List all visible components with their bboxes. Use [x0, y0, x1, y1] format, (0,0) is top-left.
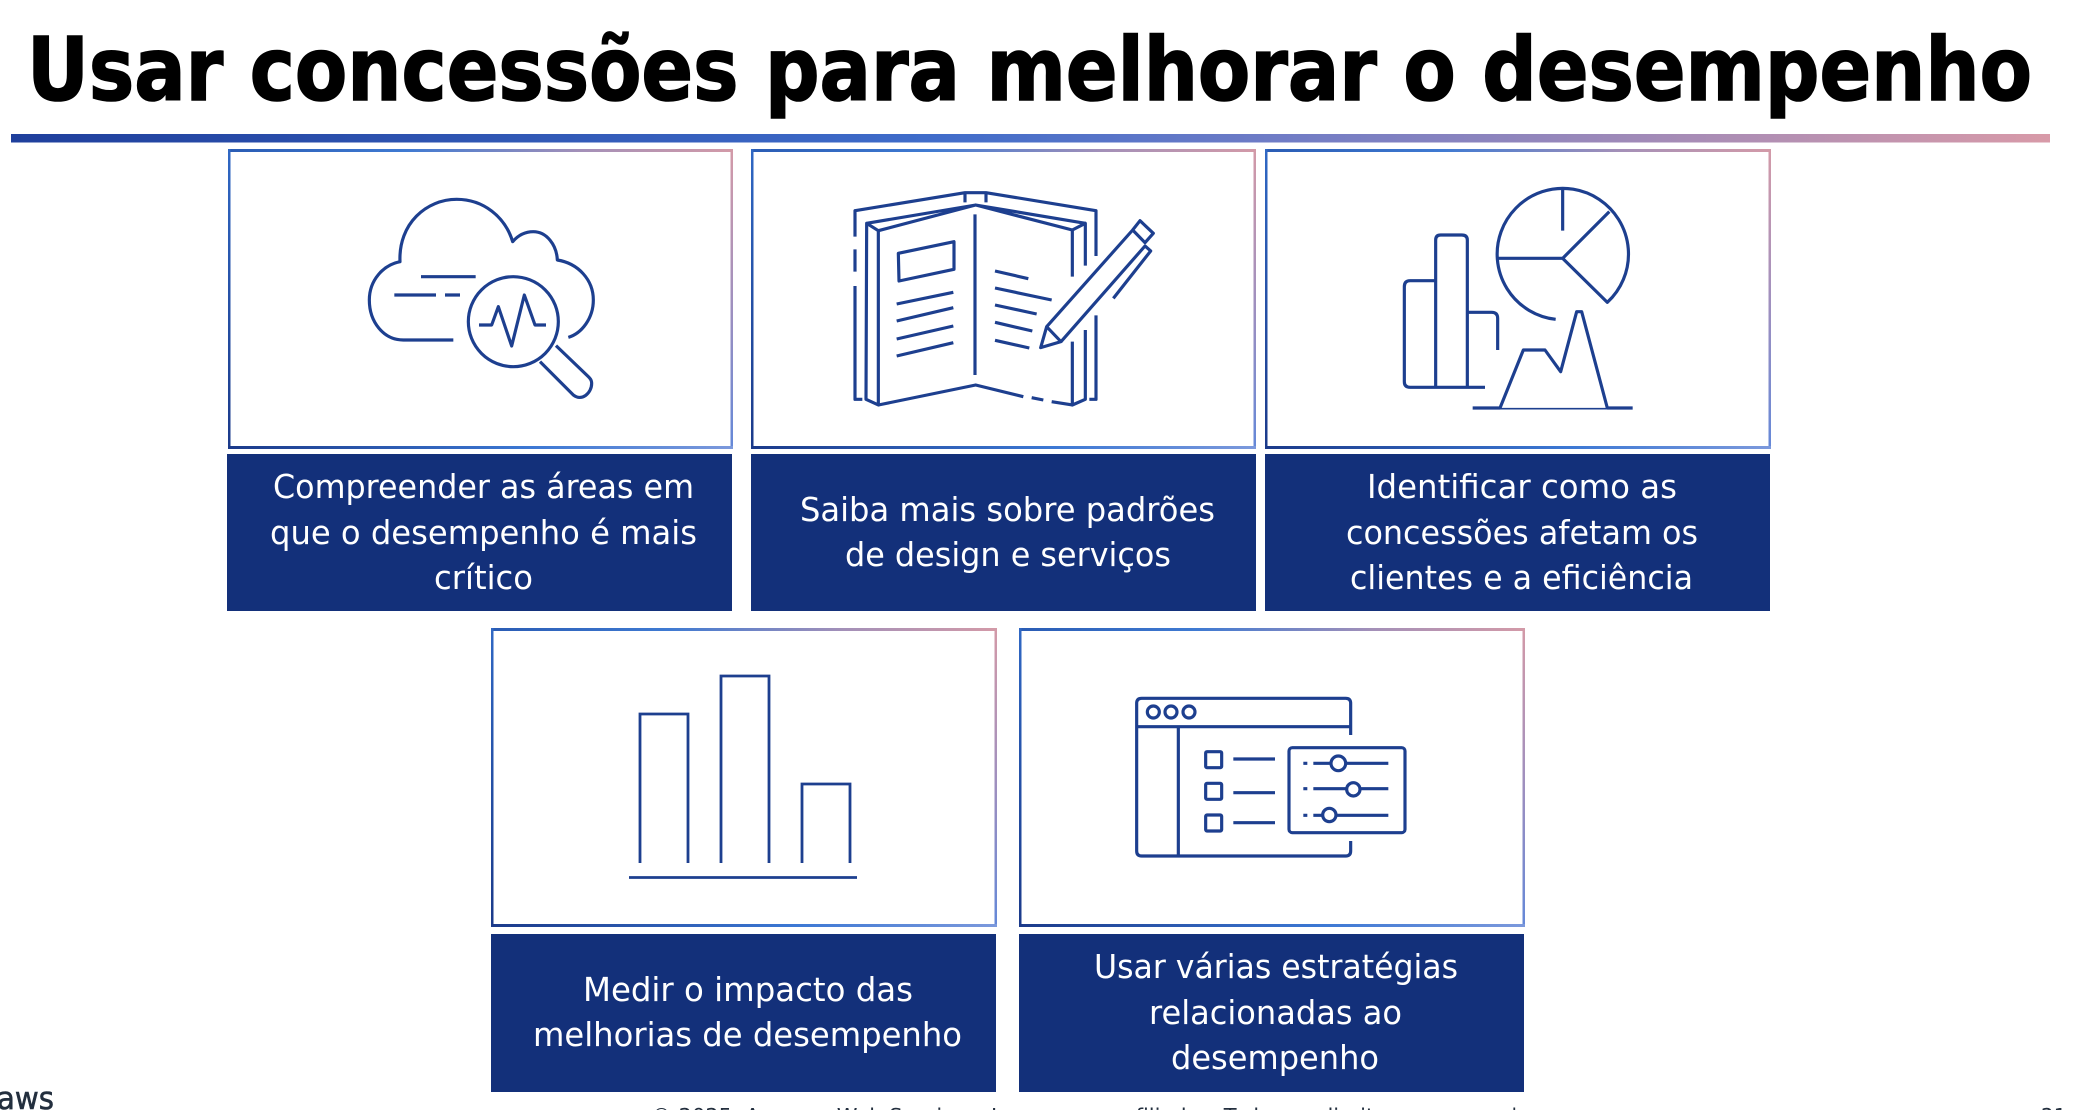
card frame 1	[228, 149, 733, 449]
label box 2: Saiba mais sobre padrões	[800, 490, 1215, 529]
label box 3: concessões afetam os	[1346, 513, 1698, 552]
icon: open book and pen	[855, 193, 1153, 405]
label box 5: desempenho	[1171, 1038, 1379, 1077]
icon: window with sliders	[1137, 698, 1405, 856]
panel: saiba mais	[751, 149, 1256, 611]
card frame 3	[1265, 149, 1771, 449]
label box 3: Identificar como as	[1367, 467, 1677, 506]
title underline gradient bar	[11, 134, 2050, 142]
label box 1	[227, 454, 732, 611]
label box 1: Compreender as áreas em	[273, 467, 694, 506]
panel: compreender as áreas	[227, 149, 733, 611]
label box 4	[491, 934, 996, 1092]
label box 3	[1265, 454, 1770, 611]
label box 2	[751, 454, 1256, 611]
label box 2: de design e serviços	[845, 535, 1171, 574]
label box 4: melhorias de desempenho	[533, 1015, 962, 1054]
card frame 5	[1019, 628, 1525, 927]
card frame 2	[751, 149, 1256, 449]
panel: identificar concessões	[1265, 149, 1771, 611]
label box 5: Usar várias estratégias	[1094, 947, 1458, 986]
card frame 4	[491, 628, 997, 927]
icon: cloud with magnifying glass	[369, 199, 593, 397]
label box 4: Medir o impacto das	[583, 970, 913, 1009]
icon: charts	[1404, 188, 1633, 409]
label box 1: crítico	[434, 558, 533, 597]
label box 3: clientes e a eficiência	[1350, 558, 1693, 597]
panel: medir o impacto	[491, 628, 997, 1092]
icon: bar chart	[629, 676, 857, 878]
label box 5: relacionadas ao	[1149, 993, 1402, 1032]
panel: várias estratégias	[1019, 628, 1525, 1092]
label box 5	[1019, 934, 1524, 1092]
label box 1: que o desempenho é mais	[270, 513, 697, 552]
